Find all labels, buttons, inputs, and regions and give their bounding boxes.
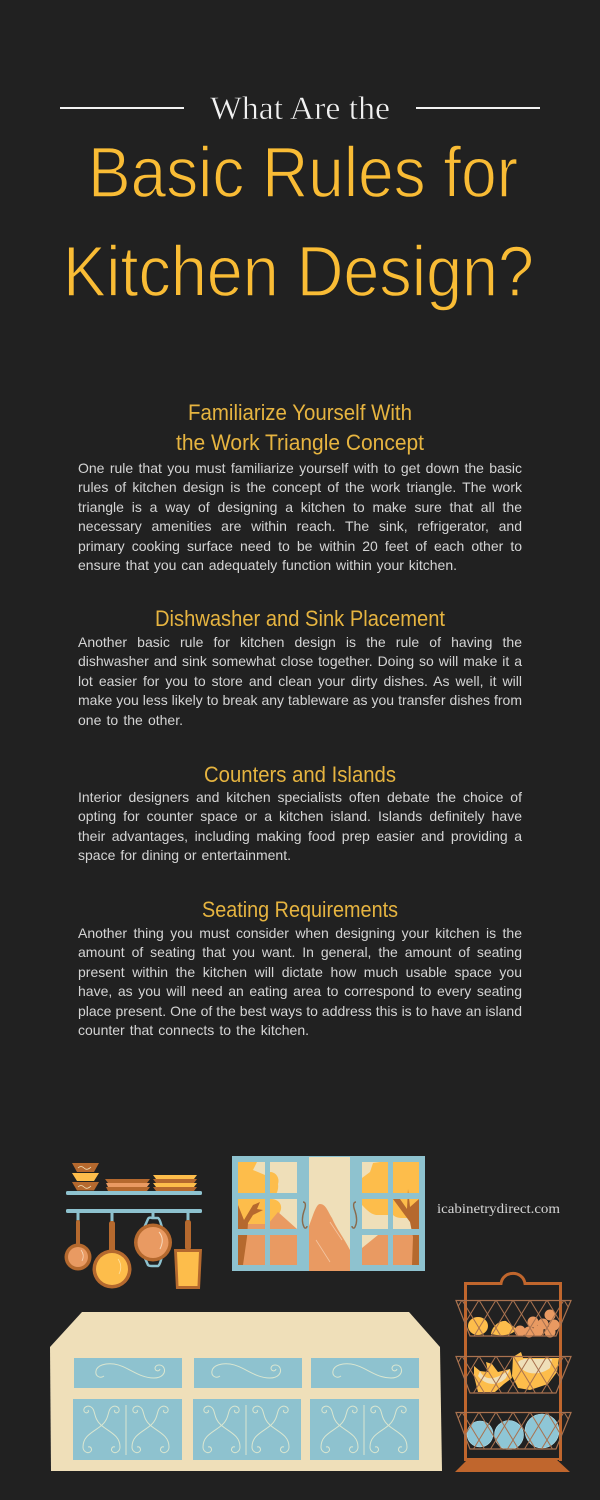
text: counters and islands: Interior designers and kitchen specialists often debate the choice of [78,789,522,805]
text: dishwasher and sink: one to the other. [78,712,183,728]
rack base [455,1459,570,1472]
text: counters and islands: opting for counter space or a kitchen island. Islands definitely have [78,808,522,824]
left mountain [243,1212,297,1265]
text: seating requirements: counter that connects to the kitchen. [78,1022,309,1038]
title kicker: What Are the: What Are the [210,91,390,127]
heading: dishwasher and sink: Dishwasher and Sink Placement [155,606,445,631]
panel: seating requirements [78,897,522,1038]
orange plates [105,1179,150,1191]
left tree foliage [238,1162,281,1225]
window frame [232,1156,425,1271]
yellow plates [153,1175,197,1191]
central panel with mountain [309,1157,350,1271]
right mountain [362,1235,388,1265]
large yellow pan [92,1213,132,1288]
text: dishwasher and sink [78,634,522,728]
text: seating requirements: present within the kitchen will dictate how much usable space you [78,964,522,980]
text: work triangle: primary cooking surface need to be within 20 feet of each other to [78,538,522,554]
panel: work triangle [78,400,522,573]
right tree trunk [393,1189,419,1265]
text: work triangle [78,460,522,573]
shelf board [66,1191,202,1195]
drawers [74,1358,419,1388]
text: dishwasher and sink: dishwasher and sink somewhat close together. Doing so will make it a [78,653,522,669]
window [232,1156,425,1271]
rack frame [466,1273,560,1461]
blue plates [467,1414,559,1450]
spatula [174,1213,202,1289]
text: seating requirements: amount of seating that you want. In general, the amount of seating [78,944,522,960]
title main: Basic Rules for Kitchen Design? [63,134,534,312]
right tree foliage [362,1162,419,1193]
rail [66,1209,202,1213]
text: dishwasher and sink: Another basic rule for kitchen design is the rule of having the [78,634,522,650]
cabinet [50,1312,442,1471]
heading: work triangle [176,400,424,455]
title [60,91,540,312]
window handles [302,1202,356,1228]
text: seating requirements: have, as you will need an eating area to correspond to every seating [78,983,522,999]
text: counters and islands: their advantages, including making food prep easier and providing a [78,828,522,844]
heading: work triangle: Familiarize Yourself With [188,400,412,425]
heading: seating requirements: Seating Requirements [202,897,398,922]
text: work triangle: triangle is a way of designing a kitchen to make sure that all the [78,499,522,515]
text: dishwasher and sink: lot easier for you to store and clean your dirty dishes. As well, it will [78,673,522,689]
drawer scrolls [96,1364,402,1378]
door scrolls [83,1405,407,1455]
fruit rack [455,1273,571,1472]
heading: counters and islands: Counters and Islands [204,762,396,787]
lemons and oranges [468,1310,560,1338]
text: work triangle: One rule that you must familiarize yourself with to get down the basic [78,460,522,476]
text: counters and islands: space for dining or entertainment. [78,847,291,863]
doors [73,1399,419,1460]
stacked bowls [72,1163,99,1190]
cabinet body [50,1312,442,1471]
panel: dishwasher and sink [78,606,522,728]
heading: work triangle: the Work Triangle Concept [176,430,424,455]
bananas [474,1352,559,1392]
shelf with dishes [66,1163,202,1195]
text: seating requirements: Another thing you must consider when designing your kitchen is the [78,925,522,941]
wire baskets [456,1300,571,1449]
panel: counters and islands [78,762,522,863]
outdoor scene in panes [238,1162,419,1265]
website label: icabinetrydirect.com [437,1202,560,1217]
illustration: kitchen scene [50,1156,572,1472]
hanging pans [64,1209,202,1289]
text: seating requirements [78,925,522,1038]
text: dishwasher and sink: make you less likely to break any tableware as you transfer dishes from [78,692,522,708]
text: work triangle: rules of kitchen design is the concept of the work triangle. The work [78,479,522,495]
small pan [64,1213,92,1270]
left tree trunk [238,1202,263,1265]
text: work triangle: ensure that you can adequately function within your kitchen. [78,557,457,573]
title main: Basic Rules for Kitchen Design?: Basic Rules for [88,134,518,213]
text: counters and islands [78,789,522,863]
text: seating requirements: place present. One of the best ways to address this is to have an island [78,1003,522,1019]
round pot with blue handles [134,1213,172,1266]
text: work triangle: necessary amenities are within reach. The sink, refrigerator, and [78,518,522,534]
title main: Basic Rules for Kitchen Design?: Kitchen Design? [63,233,534,312]
